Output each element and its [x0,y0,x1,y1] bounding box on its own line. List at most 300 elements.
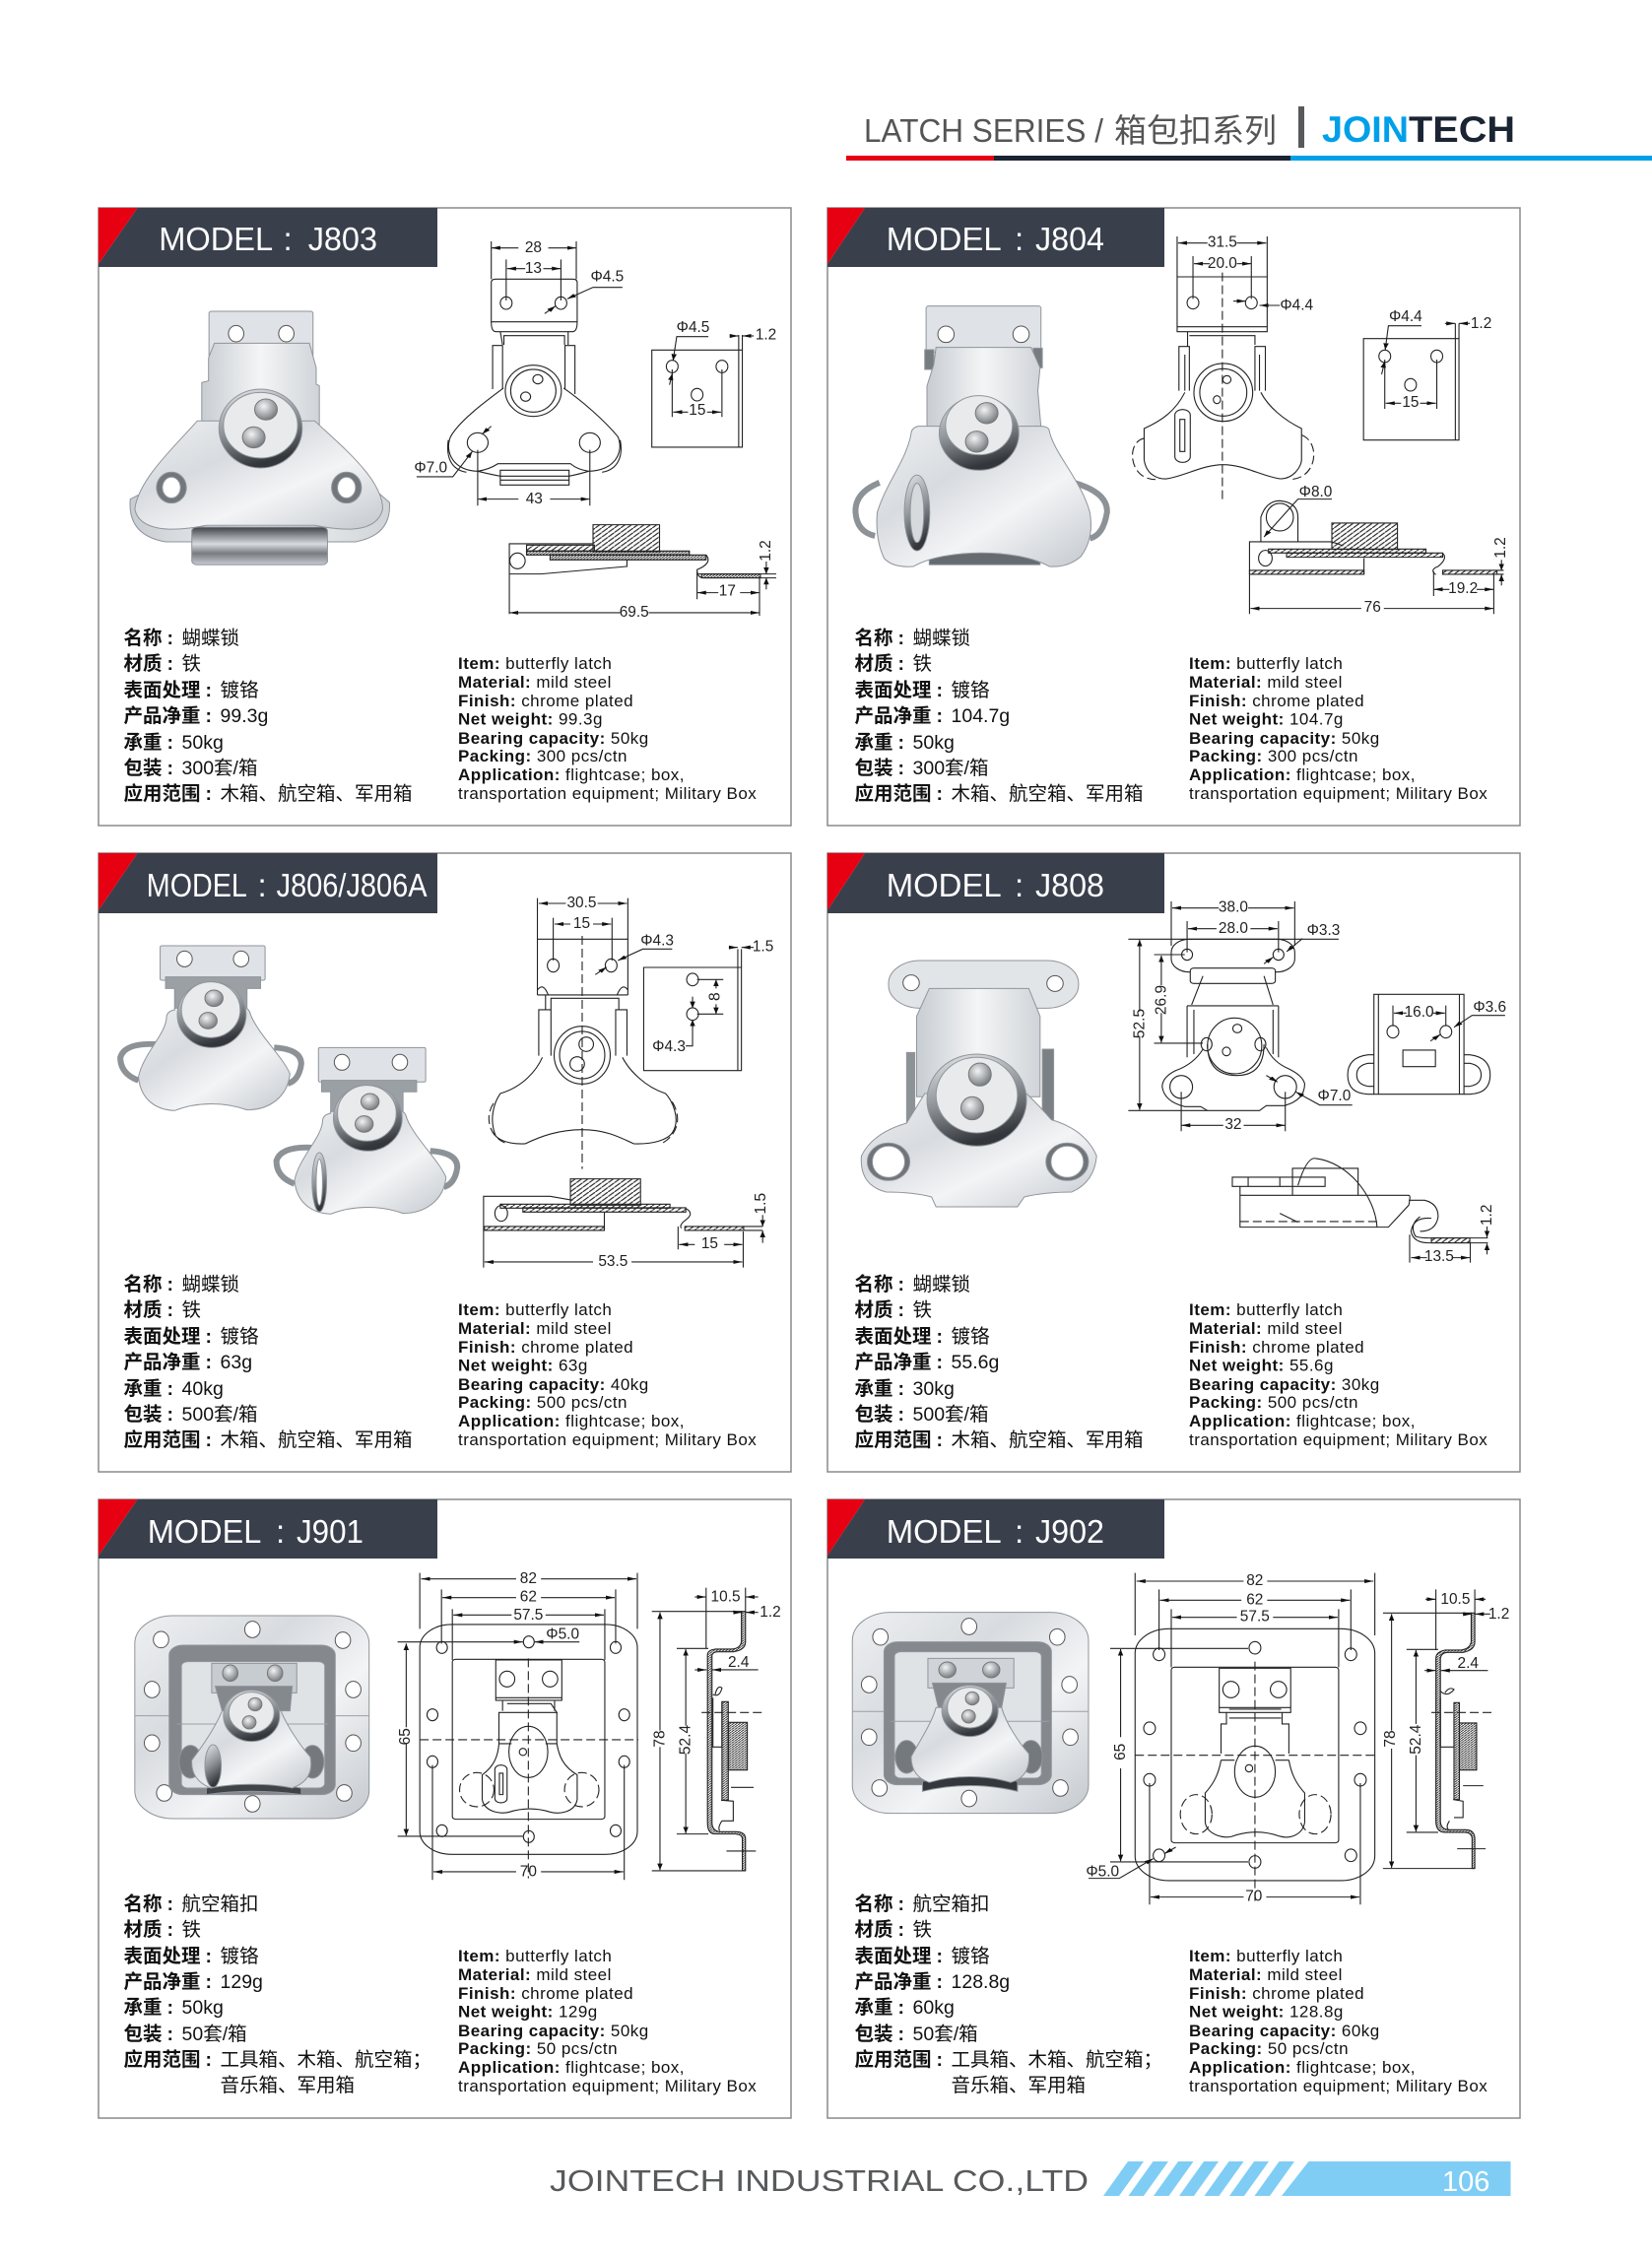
Chinese specs J803 [124,628,413,805]
Chinese specs J901: 50套/箱 [181,2024,247,2045]
product photo J902 [852,1613,1089,1814]
Chinese specs J806: : [205,1429,212,1451]
Chinese specs J901: 应用范围 [124,2048,201,2071]
Chinese specs J901: 材质 [124,1918,163,1941]
English specs J902: Finish: chrome plated [1189,1984,1364,2003]
Chinese specs J803: 承重 [124,732,163,754]
Chinese specs J808: : [898,1404,904,1426]
English specs J902: Bearing capacity: 60kg [1189,2022,1380,2040]
panel: J901 [99,1499,791,2118]
Chinese specs J808: 产品净重 [855,1352,932,1373]
Chinese specs J803: 50kg [181,732,224,754]
English specs J803 [458,654,757,803]
Chinese specs J901: : [167,2024,173,2045]
Chinese specs J804: 镀铬 [952,680,990,701]
dimension labels J803: 28 [525,239,542,256]
Chinese specs J804: 铁 [912,653,932,675]
Chinese specs J806: : [167,1378,173,1400]
model heading J808: : [1015,867,1024,903]
Chinese specs J804: : [936,680,943,701]
dimension labels J804: 1.2 [1471,315,1491,332]
dimension labels J901 [397,1570,781,1881]
Chinese specs J901: 航空箱扣 [181,1893,259,1915]
dimension labels J803: 13 [525,260,542,277]
Chinese specs J902: : [898,1997,904,2019]
dimension labels J902: 1.2 [1488,1606,1509,1623]
English specs J808: Bearing capacity: 30kg [1189,1375,1380,1394]
English specs J804: Material: mild steel [1189,673,1343,692]
Chinese specs J806: 木箱、航空箱、军用箱 [221,1429,413,1451]
Chinese specs J803: 300套/箱 [181,758,257,779]
dimension labels J901: Φ5.0 [546,1626,579,1643]
Chinese specs J804: : [936,705,943,727]
English specs J806: Net weight: 63g [458,1356,588,1375]
Chinese specs J803: 99.3g [221,705,268,727]
Chinese specs J901: 包装 [124,2024,163,2045]
page header [846,106,1652,161]
English specs J901: Material: mild steel [458,1965,612,1984]
dimension labels J803: Φ4.5 [590,268,624,286]
Chinese specs J808: 500套/箱 [912,1404,988,1426]
series title [864,112,1277,149]
English specs J803: Packing: 300 pcs/ctn [458,747,628,765]
Chinese specs J901: 产品净重 [124,1971,201,1993]
model heading J806/J806A: J806/J806A [277,867,428,903]
Chinese specs J808: : [936,1326,943,1348]
dimension labels J803: 43 [526,491,543,507]
technical drawing J804 [1133,236,1504,614]
English specs J806: Finish: chrome plated [458,1338,633,1357]
English specs J808: Application: flightcase; box, [1189,1412,1416,1430]
dimension labels J901: 52.4 [677,1725,694,1755]
Chinese specs J806: 40kg [181,1378,224,1400]
Chinese specs J803: 铁 [181,653,201,675]
dimension labels J806: 15 [701,1235,718,1252]
model heading J902: MODEL [887,1513,1002,1550]
Chinese specs J806: 名称 [124,1274,163,1295]
dimension labels J808: 1.2 [1479,1205,1495,1226]
English specs J806: Item: butterfly latch [458,1300,612,1319]
Chinese specs J804: 50kg [912,732,955,754]
dimension labels J806: 30.5 [566,895,596,911]
Chinese specs J804: 104.7g [952,705,1010,727]
Chinese specs J806: : [167,1404,173,1426]
technical drawing J808 [1128,901,1505,1263]
Chinese specs J806 [124,1274,413,1451]
English specs J901: Finish: chrome plated [458,1984,633,2003]
Chinese specs J901: : [205,2049,212,2071]
English specs J808: Item: butterfly latch [1189,1300,1343,1319]
model heading J808 [827,853,1164,913]
Chinese specs J804 [855,628,1144,805]
dimension labels J902: 62 [1246,1591,1263,1609]
Chinese specs J804: 蝴蝶锁 [912,628,970,649]
Chinese specs J902 [855,1893,1162,2096]
English specs J902: transportation equipment; Military Box [1189,2077,1487,2095]
dimension labels J808: Φ3.6 [1473,999,1506,1016]
dimension labels J901: 1.2 [760,1604,781,1621]
Chinese specs J804: 承重 [855,732,893,754]
Chinese specs J902: 音乐箱、军用箱 [952,2075,1086,2096]
English specs J808: Finish: chrome plated [1189,1338,1364,1357]
Chinese specs J806: : [167,1274,173,1295]
series title: LATCH SERIES / [864,112,1104,149]
Chinese specs J806: : [205,1352,212,1373]
dimension labels J901: 78 [652,1730,669,1748]
Chinese specs J902: 镀铬 [952,1946,990,1967]
dimension labels J902: 57.5 [1240,1608,1270,1626]
Chinese specs J901: 音乐箱、军用箱 [221,2075,355,2096]
Chinese specs J808: 55.6g [952,1352,999,1373]
model heading J901: MODEL [148,1513,261,1550]
Chinese specs J901: 名称 [124,1893,163,1915]
Chinese specs J806: 铁 [181,1299,201,1321]
dimension labels J803: Φ4.5 [677,319,709,336]
Chinese specs J902: 包装 [855,2024,893,2045]
Chinese specs J804: 应用范围 [855,782,932,805]
Chinese specs J803: 名称 [124,628,163,649]
dimension labels J902: 70 [1245,1888,1262,1905]
product photo J806A [277,1047,457,1214]
technical drawing J803 [417,241,776,616]
technical drawing J806 [484,898,762,1268]
Chinese specs J803: : [167,628,173,649]
English specs J803: Item: butterfly latch [458,654,612,673]
English specs J804: Item: butterfly latch [1189,654,1343,673]
dimension labels J808: 26.9 [1153,985,1169,1015]
dimension labels J902 [1086,1572,1509,1905]
dimension labels J902: 65 [1112,1744,1129,1760]
Chinese specs J901: 50kg [181,1997,224,2019]
dimension labels J901: 10.5 [711,1588,741,1606]
Chinese specs J901: : [167,1893,173,1915]
English specs J804: Net weight: 104.7g [1189,709,1344,729]
footer stripes [1103,2161,1511,2196]
Chinese specs J808: 承重 [855,1378,893,1400]
dimension labels J804: 76 [1364,599,1381,616]
Chinese specs J804: 木箱、航空箱、军用箱 [952,783,1144,805]
dimension labels J902: 78 [1382,1730,1399,1748]
model heading J803: : [284,221,293,257]
Chinese specs J902: 航空箱扣 [912,1893,990,1915]
Chinese specs J803: 表面处理 [124,680,201,701]
dimension labels J804 [1208,233,1509,616]
dimension labels J901: 57.5 [513,1607,543,1624]
Chinese specs J806: 500套/箱 [181,1404,257,1426]
Chinese specs J806: 63g [221,1352,252,1373]
Chinese specs J808 [855,1274,1144,1451]
English specs J806 [458,1300,757,1449]
Chinese specs J901: 镀铬 [221,1946,259,1967]
brand logo: JOIN [1322,109,1409,150]
English specs J808: Material: mild steel [1189,1319,1343,1338]
model heading J803: J803 [308,221,377,257]
dimension labels J808: 38.0 [1219,898,1248,916]
English specs J901: transportation equipment; Military Box [458,2077,757,2095]
Chinese specs J902: 材质 [855,1918,893,1941]
Chinese specs J804: : [898,628,904,649]
dimension labels J901: 62 [520,1588,537,1606]
Chinese specs J803: : [205,680,212,701]
English specs J803: Finish: chrome plated [458,692,633,710]
Chinese specs J806: 承重 [124,1378,163,1400]
English specs J804: Bearing capacity: 50kg [1189,729,1380,748]
dimension labels J902: Φ5.0 [1086,1863,1119,1881]
Chinese specs J902: : [936,2049,943,2071]
Chinese specs J804: 300套/箱 [912,758,988,779]
Chinese specs J806: 应用范围 [124,1428,201,1451]
Chinese specs J901: : [205,1971,212,1993]
dimension labels J804: 15 [1402,394,1420,411]
dimension labels J803: Φ7.0 [414,459,447,477]
Chinese specs J806: 表面处理 [124,1326,201,1348]
Chinese specs J803: 应用范围 [124,782,201,805]
Chinese specs J803: 产品净重 [124,705,201,727]
English specs J901: Bearing capacity: 50kg [458,2022,649,2040]
dimension labels J808: Φ3.3 [1307,922,1340,939]
English specs J804: Application: flightcase; box, [1189,765,1416,784]
dimension labels J902: 82 [1246,1572,1263,1589]
product photo J808 [861,961,1096,1207]
dimension labels J804: 1.2 [1492,537,1509,559]
Chinese specs J808: 材质 [855,1298,893,1321]
Chinese specs J806: : [167,1299,173,1321]
Chinese specs J808: 镀铬 [952,1326,990,1348]
Chinese specs J804: : [898,732,904,754]
model heading J806/J806A [99,853,437,913]
dimension labels J803 [414,239,776,621]
Chinese specs J803: : [167,653,173,675]
English specs J808: transportation equipment; Military Box [1189,1430,1487,1449]
English specs J806: Material: mild steel [458,1319,612,1338]
model heading J804: J804 [1035,221,1104,257]
Chinese specs J901 [124,1893,431,2096]
English specs J901 [458,1947,757,2095]
Chinese specs J902: 60kg [912,1997,955,2019]
dimension labels J804: Φ4.4 [1389,308,1422,325]
model heading J901 [99,1499,437,1559]
Chinese specs J808: 铁 [912,1299,932,1321]
Chinese specs J808: 应用范围 [855,1428,932,1451]
Chinese specs J808: 30kg [912,1378,955,1400]
English specs J901: Packing: 50 pcs/ctn [458,2039,618,2058]
Chinese specs J804: 名称 [855,628,893,649]
Chinese specs J803: 包装 [124,758,163,779]
dimension labels J806: 15 [573,915,590,932]
model heading J902 [827,1499,1164,1559]
dimension labels J902: 2.4 [1458,1655,1479,1672]
dimension labels J806: 1.5 [753,938,773,956]
dimension labels J806: 53.5 [598,1253,628,1270]
English specs J902: Application: flightcase; box, [1189,2058,1416,2077]
Chinese specs J806: 产品净重 [124,1352,201,1373]
product photo J804 [855,306,1107,566]
dimension labels J804: 19.2 [1448,580,1478,597]
Chinese specs J808: : [936,1429,943,1451]
technical drawing J901 [398,1573,762,1880]
Chinese specs J901: 表面处理 [124,1946,201,1967]
English specs J806: Packing: 500 pcs/ctn [458,1393,628,1412]
Chinese specs J806: 材质 [124,1298,163,1321]
English specs J902: Packing: 50 pcs/ctn [1189,2039,1349,2058]
model heading J806/J806A: MODEL [147,867,247,903]
brand logo: TECH [1409,109,1515,150]
English specs J803: Net weight: 99.3g [458,709,603,729]
Chinese specs J803: 材质 [124,652,163,675]
model heading J808: MODEL [887,867,1002,903]
dimension labels J804: 31.5 [1208,233,1237,251]
dimension labels J803: 1.2 [758,540,774,562]
product photo J901 [135,1616,369,1819]
Chinese specs J902: 铁 [912,1919,932,1941]
English specs J804 [1189,654,1487,803]
Chinese specs J901: : [167,1997,173,2019]
dimension labels J804: Φ4.4 [1280,297,1313,314]
Chinese specs J902: 50套/箱 [912,2024,978,2045]
dimension labels J901: 65 [397,1728,414,1745]
English specs J803: transportation equipment; Military Box [458,784,757,803]
dimension labels J808: 16.0 [1405,1004,1434,1021]
Chinese specs J806: 包装 [124,1404,163,1426]
model heading J803: MODEL [159,221,273,257]
tricolor rule [846,156,1652,161]
English specs J901: Item: butterfly latch [458,1947,612,1965]
English specs J804: Finish: chrome plated [1189,692,1364,710]
English specs J808: Net weight: 55.6g [1189,1356,1334,1375]
model heading J803 [99,208,437,267]
dimension labels J804: Φ8.0 [1299,484,1332,500]
dimension labels J808: 32 [1224,1116,1242,1133]
model heading J804: : [1015,221,1024,257]
English specs J804: Packing: 300 pcs/ctn [1189,747,1358,765]
English specs J902: Item: butterfly latch [1189,1947,1343,1965]
dimension labels J806 [566,895,773,1270]
company name: JOINTECH INDUSTRIAL CO.,LTD [550,2163,1089,2198]
model heading J804: MODEL [887,221,1002,257]
Chinese specs J808: : [898,1274,904,1295]
panel: J902 [827,1499,1520,2118]
dimension labels J808: 13.5 [1424,1248,1454,1265]
dimension labels J808: Φ7.0 [1318,1088,1351,1104]
English specs J901: Net weight: 129g [458,2002,598,2022]
Chinese specs J803: : [205,783,212,805]
Chinese specs J808: : [898,1299,904,1321]
dimension labels J901: 2.4 [728,1654,750,1671]
header divider bar [1298,106,1304,148]
Chinese specs J808: 木箱、航空箱、军用箱 [952,1429,1144,1451]
Chinese specs J806: : [205,1326,212,1348]
dimension labels J803: 17 [719,582,736,600]
model heading J806/J806A: : [258,867,267,903]
Chinese specs J808: : [898,1378,904,1400]
dimension labels J901: 82 [520,1570,537,1587]
product photo J803 [130,311,390,564]
Chinese specs J804: : [898,653,904,675]
Chinese specs J901: : [205,1946,212,1967]
Chinese specs J901: 承重 [124,1997,163,2019]
Chinese specs J804: 表面处理 [855,680,932,701]
model heading J902: : [1015,1513,1024,1550]
Chinese specs J804: : [936,783,943,805]
Chinese specs J902: : [936,1946,943,1967]
Chinese specs J902: : [936,1971,943,1993]
page number: 106 [1442,2166,1489,2198]
Chinese specs J803: 蝴蝶锁 [181,628,239,649]
Chinese specs J902: 表面处理 [855,1946,932,1967]
Chinese specs J901: 129g [221,1971,263,1993]
Chinese specs J803: : [205,705,212,727]
Chinese specs J901: : [167,1919,173,1941]
Chinese specs J806: 蝴蝶锁 [181,1274,239,1295]
Chinese specs J808: : [936,1352,943,1373]
dimension labels J806: 1.5 [753,1193,769,1214]
Chinese specs J902: 128.8g [952,1971,1010,1993]
dimension labels J902: 10.5 [1440,1591,1470,1608]
Chinese specs J804: 产品净重 [855,705,932,727]
dimension labels J901: 70 [520,1863,537,1881]
dimension labels J808 [1131,898,1506,1265]
model heading J808: J808 [1035,867,1104,903]
Chinese specs J803: : [167,758,173,779]
panel: J804 [827,208,1520,826]
Chinese specs J902: : [898,2024,904,2045]
Chinese specs J804: 包装 [855,758,893,779]
English specs J902: Net weight: 128.8g [1189,2002,1344,2022]
English specs J902: Material: mild steel [1189,1965,1343,1984]
dimension labels J808: 28.0 [1219,920,1248,937]
Chinese specs J901: 工具箱、木箱、航空箱； [221,2049,431,2071]
dimension labels J902: 52.4 [1408,1724,1424,1755]
Chinese specs J804: : [898,758,904,779]
Chinese specs J902: 应用范围 [855,2048,932,2071]
Chinese specs J808: 蝴蝶锁 [912,1274,970,1295]
panel: J808 [827,853,1520,1472]
English specs J806: Bearing capacity: 40kg [458,1375,649,1394]
Chinese specs J902: 承重 [855,1997,893,2019]
Chinese specs J803: 镀铬 [221,680,259,701]
English specs J803: Bearing capacity: 50kg [458,729,649,748]
dimension labels J803: 1.2 [756,326,776,344]
dimension labels J806: 8 [706,992,723,1001]
page footer [550,2161,1511,2198]
Chinese specs J806: 镀铬 [221,1326,259,1348]
model heading J901: J901 [297,1513,363,1550]
Chinese specs J803: 木箱、航空箱、军用箱 [221,783,413,805]
dimension labels J803: 69.5 [620,604,649,621]
Chinese specs J901: 铁 [181,1919,201,1941]
English specs J902 [1189,1947,1487,2095]
English specs J901: Application: flightcase; box, [458,2058,685,2077]
dimension labels J804: 20.0 [1208,255,1237,272]
English specs J806: transportation equipment; Military Box [458,1430,757,1449]
panel: J806/J806A [99,853,791,1472]
product photo J806 [120,946,301,1110]
technical drawing J902 [1089,1573,1492,1904]
English specs J808 [1189,1300,1487,1449]
dimension labels J806: Φ4.3 [640,932,674,950]
Chinese specs J902: 工具箱、木箱、航空箱； [952,2049,1162,2071]
Chinese specs J808: 包装 [855,1404,893,1426]
model heading J902: J902 [1035,1513,1104,1550]
model heading J901: : [276,1513,285,1550]
model heading J804 [827,208,1164,267]
English specs J803: Material: mild steel [458,673,612,692]
panel: J803 [99,208,791,826]
Chinese specs J808: 表面处理 [855,1326,932,1348]
Chinese specs J902: 产品净重 [855,1971,932,1993]
English specs J804: transportation equipment; Military Box [1189,784,1487,803]
Chinese specs J803: : [167,732,173,754]
